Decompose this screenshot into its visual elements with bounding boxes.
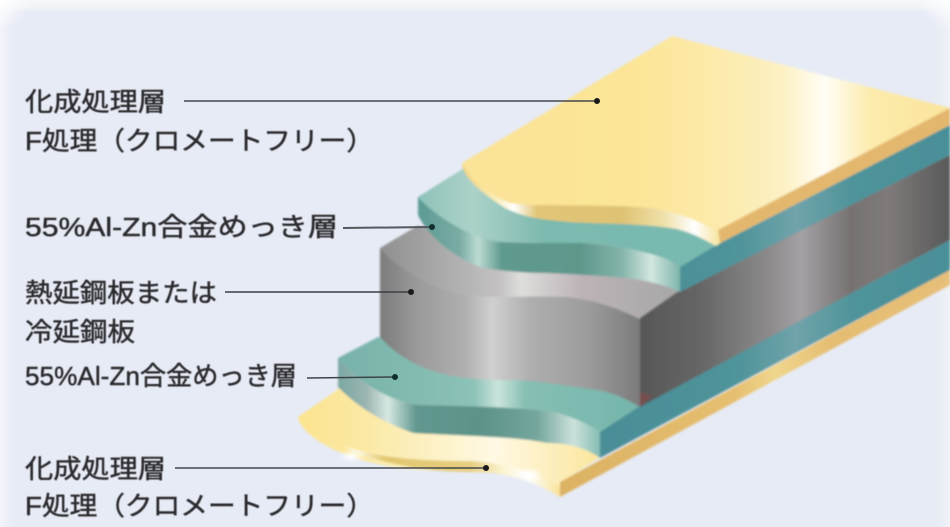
label: bottom chemical conversion coating: F処理（クロメートフリー）: [25, 491, 374, 521]
leader: upper plating: [343, 224, 435, 230]
layer: top chemical conversion coating: [462, 36, 950, 246]
label: bottom chemical conversion coating: [25, 454, 374, 521]
label: top chemical conversion coating: F処理（クロメートフリー）: [25, 126, 374, 156]
label: top chemical conversion coating: [25, 87, 374, 156]
label: lower plating layer: 55%Al-Zn合金めっき層: [25, 361, 297, 391]
diagram: layered steel sheet: [298, 36, 950, 497]
label: steel sheet: 熱延鋼板または: [25, 278, 217, 308]
leader: top coating: [184, 98, 600, 104]
label: top chemical conversion coating: 化成処理層: [25, 87, 166, 117]
leader: bottom coating: [175, 465, 489, 471]
layer: bottom chemical conversion coating: [298, 270, 950, 497]
label: steel sheet: [25, 278, 217, 347]
label: upper plating layer: 55%Al-Zn合金めっき層: [25, 212, 338, 242]
label: steel sheet: 冷延鋼板: [25, 317, 135, 347]
leader: steel core: [225, 289, 414, 295]
layer: steel sheet core: [380, 155, 950, 407]
leader: lower plating: [307, 374, 398, 380]
label: bottom chemical conversion coating: 化成処理層: [25, 454, 166, 484]
layer: lower Al-Zn plating: [338, 240, 950, 458]
layer: upper Al-Zn plating: [418, 125, 950, 292]
